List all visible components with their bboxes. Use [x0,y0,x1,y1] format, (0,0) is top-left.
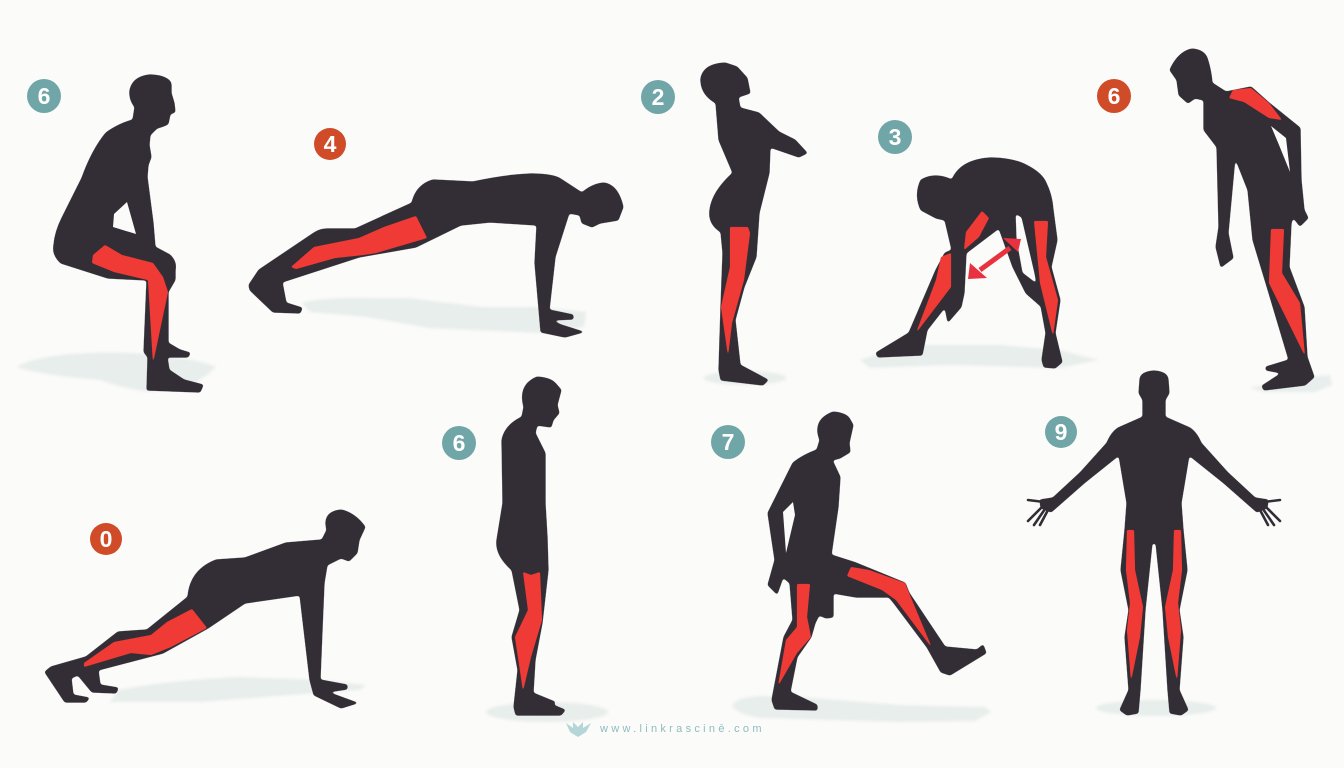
watermark text: www.linkrascinē.com [599,723,765,735]
figure: standing side view [486,377,608,722]
shadow: hunched standing [1250,375,1332,392]
badge: 3 teal [878,120,912,154]
muscle highlight: leg [291,216,427,269]
shadow: forward bend [860,345,1098,368]
silhouette: squat [54,75,203,392]
figure: hunched standing [1170,49,1332,392]
badge: 7 teal: 7 [722,429,734,455]
muscle highlight: raised thigh and shin [847,567,932,648]
figure: forward bend [860,158,1098,368]
shadow: leg kick [732,696,991,722]
badge: 0 orange: 0 [100,526,112,552]
figure: squat side view [17,75,216,392]
muscle highlight: leg [721,227,750,356]
muscle highlight: thigh and shin [92,245,168,363]
silhouette: standing back arch [701,63,807,385]
badge: 2 teal [641,80,675,114]
muscle highlight: left leg [916,253,951,333]
muscle highlight: left leg [1126,530,1143,681]
badge: 6 orange: 6 [1108,83,1120,109]
badge: 6 teal [27,79,61,113]
badge: 6 teal lower: 6 [453,430,465,456]
muscle highlight: hip [964,211,989,250]
muscle highlight: standing leg [778,584,811,686]
badge: 6 orange [1097,79,1131,113]
arrow: double headed stretch [968,238,1021,279]
badge: 0 orange [90,523,122,555]
shadow: standing back arch [704,371,786,385]
badge: 7 teal [711,425,745,459]
shadow: standing side view [486,702,608,722]
badge: 9 teal [1045,416,1077,448]
muscle highlight: leg [1269,229,1305,356]
badge: 6 teal lower [442,426,476,460]
figure: high plank [249,174,623,337]
figure: raised plank [45,510,366,708]
badge: 6 teal: 6 [38,83,50,109]
silhouette: leg kick [768,412,986,710]
shadow: raised plank [110,677,366,702]
muscle highlight: right leg [1165,530,1182,681]
badge: 4 orange: 4 [324,131,337,157]
figure: standing back arch [701,63,807,385]
shadow: front view [1096,700,1216,716]
icon: lotus logo [566,722,591,737]
badge: 4 orange [314,128,346,160]
muscle highlight: shoulder [1229,88,1282,120]
silhouette: raised plank [45,510,365,708]
silhouette: plank [249,174,623,337]
badge: 3 teal: 3 [889,124,901,150]
icon: left hand fingers [1028,500,1048,525]
muscle highlight: leg [515,572,542,691]
silhouette: hunched standing [1170,49,1314,390]
shadow: squat [17,353,216,392]
badge: 2 teal: 2 [652,84,664,110]
silhouette: standing side view [497,377,565,715]
muscle highlight: right leg [1034,221,1058,336]
shadow: plank [302,298,586,333]
muscle highlight: leg [84,609,207,667]
icon: right hand fingers [1260,500,1280,525]
silhouette: forward bend [876,158,1062,368]
figure: leg kick [732,412,991,722]
silhouette: front view [1040,371,1268,715]
badge: 9 teal: 9 [1055,419,1067,445]
figure: front view arms open [1028,371,1280,716]
